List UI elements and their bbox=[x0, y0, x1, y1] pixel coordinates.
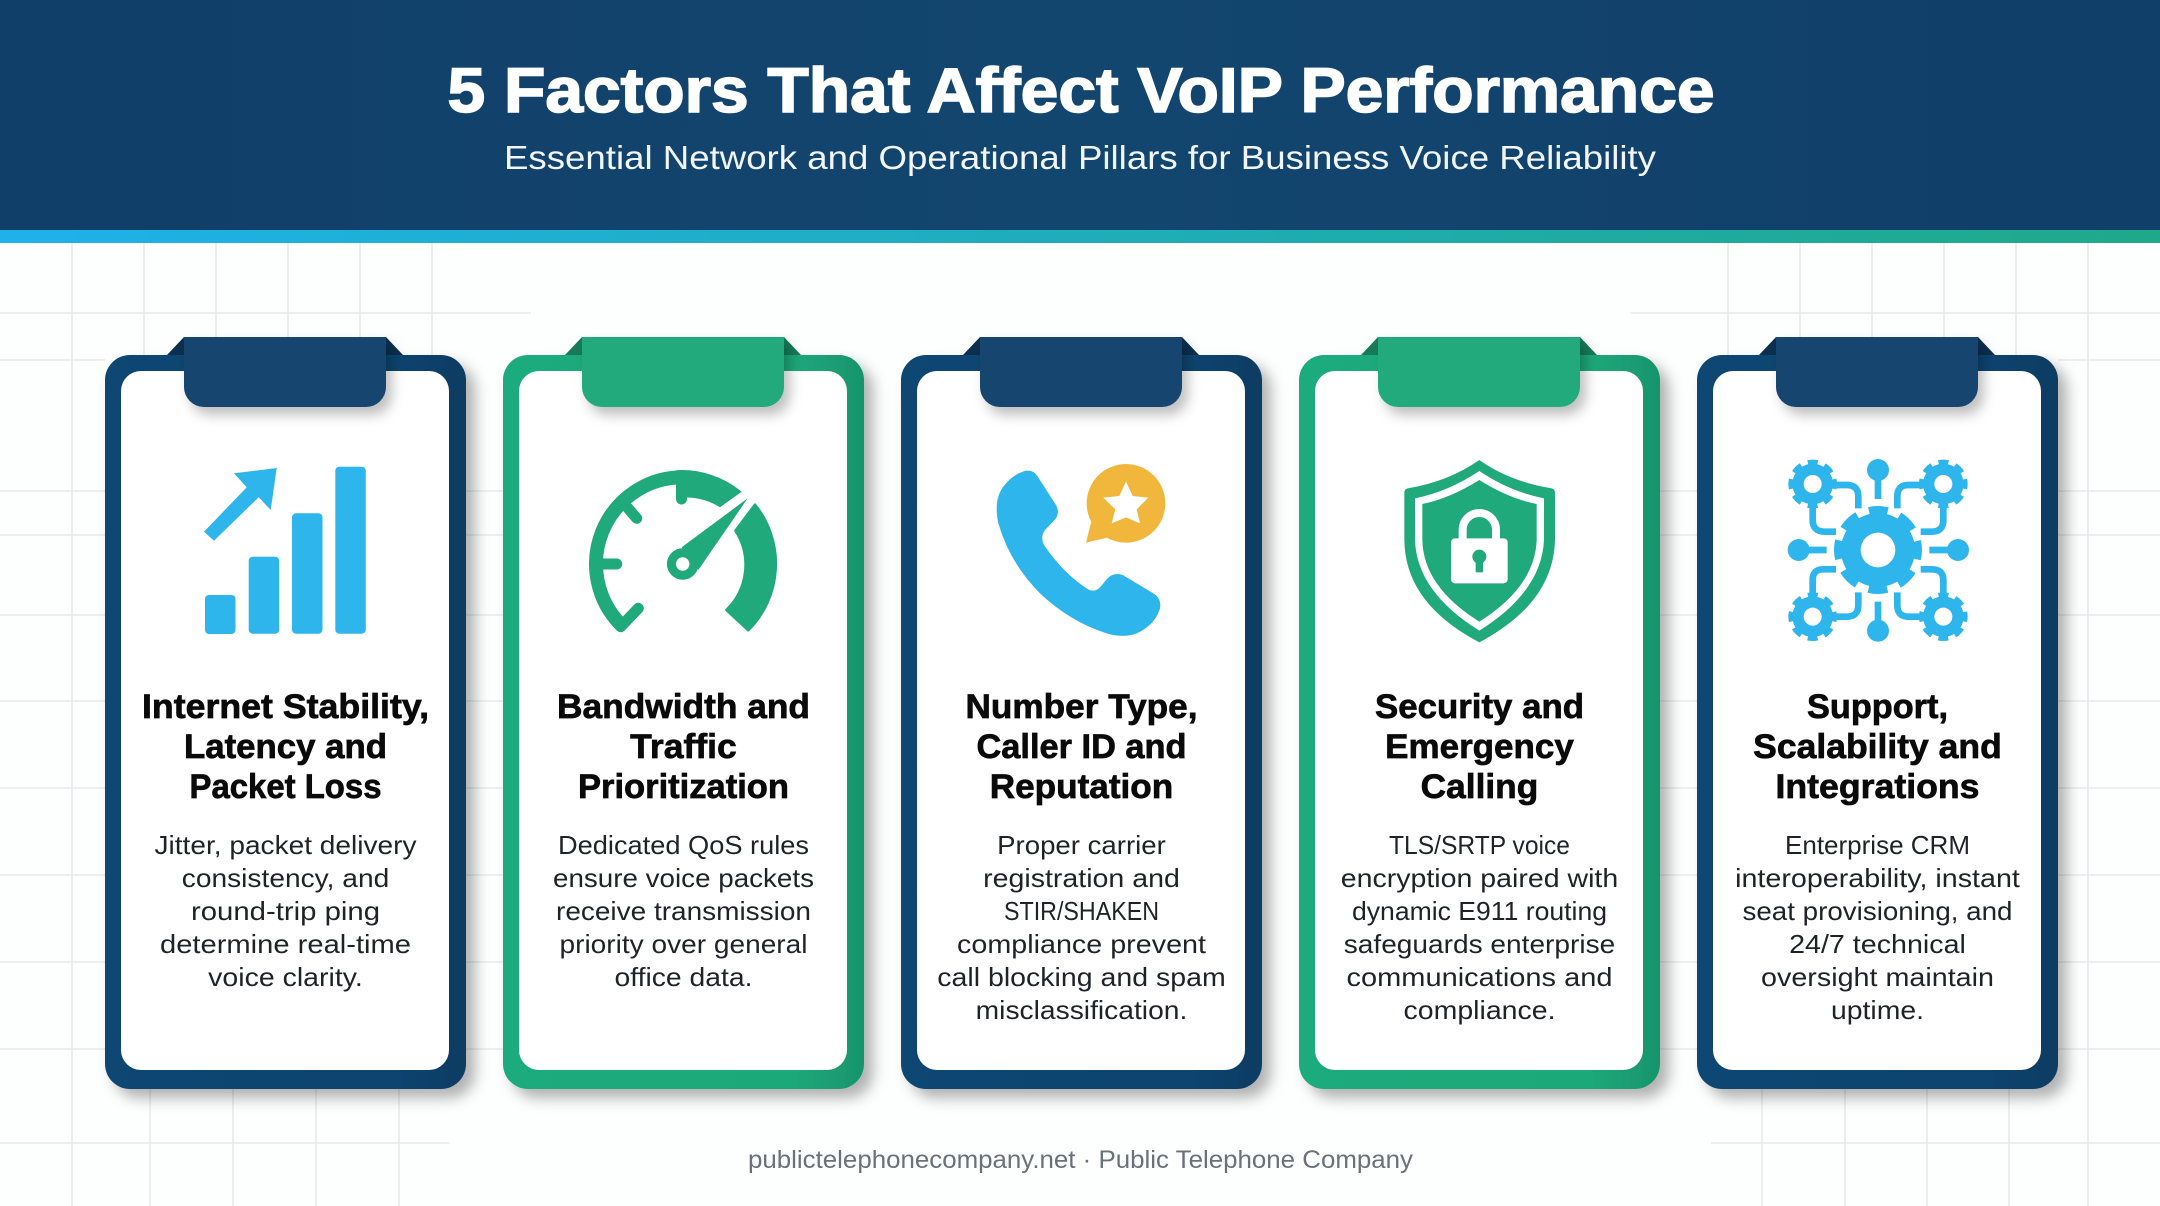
heading: Caller ID and bbox=[976, 728, 1186, 766]
description: 24/7 technical bbox=[1789, 929, 1966, 959]
clip tab bbox=[167, 337, 403, 407]
heading: Number Type, bbox=[966, 688, 1198, 726]
panel: security bbox=[1299, 337, 1660, 1089]
heading: Reputation bbox=[990, 768, 1173, 806]
heading bbox=[1375, 688, 1584, 806]
icon: speedometer bbox=[596, 470, 776, 630]
description: uptime. bbox=[1831, 995, 1924, 1025]
description bbox=[1341, 830, 1618, 1025]
description: compliance prevent bbox=[957, 929, 1207, 959]
clip tab bbox=[963, 337, 1199, 407]
description: encryption paired with bbox=[1341, 863, 1618, 893]
description: oversight maintain bbox=[1761, 962, 1994, 992]
heading: Bandwidth and bbox=[557, 688, 810, 726]
description: receive transmission bbox=[556, 896, 811, 926]
heading: Packet Loss bbox=[190, 768, 382, 806]
description bbox=[1735, 830, 2021, 1025]
panel: number type bbox=[901, 337, 1262, 1089]
description: dynamic E911 routing bbox=[1352, 896, 1607, 926]
panel: internet stability bbox=[105, 337, 466, 1089]
description: Jitter, packet delivery bbox=[154, 830, 416, 860]
subtitle: Essential Network and Operational Pillars for Business Voice Reliability bbox=[504, 139, 1657, 176]
heading: Emergency bbox=[1385, 728, 1574, 766]
clip tab bbox=[1759, 337, 1995, 407]
card frame bbox=[105, 355, 466, 1089]
title: 5 Factors That Affect VoIP Performance bbox=[448, 56, 1714, 126]
description bbox=[937, 830, 1226, 1025]
icon: gears network bbox=[1788, 459, 1969, 642]
footer: publictelephonecompany.net · Public Telephone Company bbox=[748, 1146, 1414, 1174]
description: safeguards enterprise bbox=[1344, 929, 1615, 959]
heading: Security and bbox=[1375, 688, 1584, 726]
heading: Traffic bbox=[630, 728, 737, 766]
description: Proper carrier bbox=[997, 830, 1166, 860]
heading: Support, bbox=[1807, 688, 1948, 726]
description: registration and bbox=[983, 863, 1180, 893]
clip tab bbox=[1361, 337, 1597, 407]
clip tab bbox=[565, 337, 801, 407]
heading: Internet Stability, bbox=[142, 688, 429, 726]
card frame bbox=[901, 355, 1262, 1089]
heading: Integrations bbox=[1776, 768, 1980, 806]
panel: bandwidth bbox=[503, 337, 864, 1089]
panel: support bbox=[1697, 337, 2058, 1089]
heading bbox=[557, 688, 810, 806]
heading: Scalability and bbox=[1753, 728, 2002, 766]
description: interoperability, instant bbox=[1735, 863, 2021, 893]
card frame bbox=[1697, 355, 2058, 1089]
description: round-trip ping bbox=[191, 896, 380, 926]
description: voice clarity. bbox=[208, 962, 363, 992]
card frame bbox=[1299, 355, 1660, 1089]
accent stripe bbox=[0, 230, 2160, 243]
icon: bar chart with arrow bbox=[204, 467, 366, 634]
description: TLS/SRTP voice bbox=[1389, 830, 1570, 860]
description: ensure voice packets bbox=[553, 863, 814, 893]
description: Enterprise CRM bbox=[1785, 830, 1970, 860]
description: STIR/SHAKEN bbox=[1004, 896, 1159, 926]
description: priority over general bbox=[560, 929, 808, 959]
header banner bbox=[0, 0, 2160, 243]
heading: Latency and bbox=[184, 728, 387, 766]
description: consistency, and bbox=[182, 863, 389, 893]
icon: phone with star bubble bbox=[997, 464, 1165, 636]
description: communications and bbox=[1346, 962, 1612, 992]
heading bbox=[1753, 688, 2002, 806]
heading bbox=[142, 688, 429, 806]
icon: shield with lock bbox=[1404, 460, 1555, 642]
description: compliance. bbox=[1404, 995, 1556, 1025]
description bbox=[154, 830, 416, 992]
heading: Calling bbox=[1421, 768, 1538, 806]
description: misclassification. bbox=[976, 995, 1187, 1025]
description: seat provisioning, and bbox=[1742, 896, 2012, 926]
description: office data. bbox=[614, 962, 752, 992]
description: Dedicated QoS rules bbox=[558, 830, 809, 860]
card frame bbox=[503, 355, 864, 1089]
heading bbox=[966, 688, 1198, 806]
heading: Prioritization bbox=[578, 768, 789, 806]
description: call blocking and spam bbox=[937, 962, 1226, 992]
description bbox=[553, 830, 814, 992]
description: determine real-time bbox=[160, 929, 411, 959]
